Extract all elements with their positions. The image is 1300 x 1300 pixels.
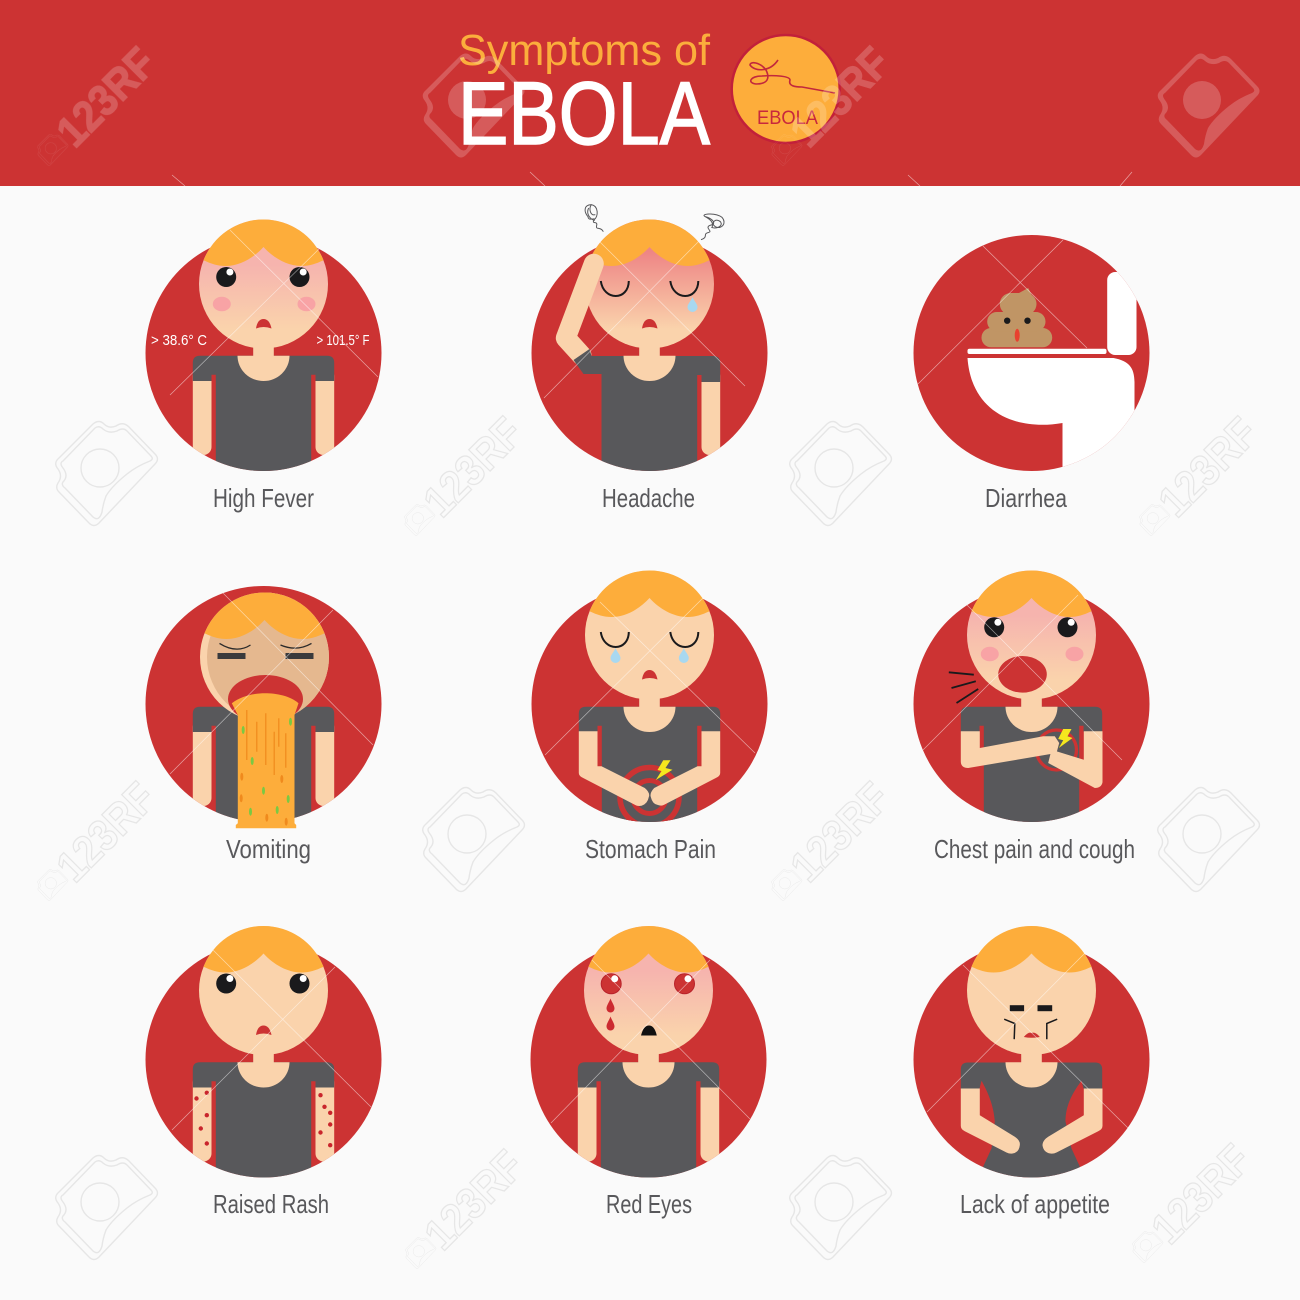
pain rings — [620, 768, 679, 826]
toilet — [968, 272, 1136, 478]
label: lack of appetite: Lack of appetite — [960, 1189, 1110, 1219]
rash dots — [194, 1091, 332, 1147]
arms across chest — [961, 731, 1102, 788]
folded arms — [579, 731, 720, 806]
title: Symptoms of: Symptoms of — [458, 26, 711, 75]
label: raised rash: Raised Rash — [213, 1189, 329, 1219]
panel: diarrhea — [914, 235, 1150, 478]
panel: chest pain and cough — [914, 570, 1150, 829]
label: vomiting: Vomiting — [226, 834, 311, 864]
panel: headache — [532, 205, 768, 478]
title: EBOLA: EBOLA — [458, 63, 711, 163]
watermarks: header — [21, 38, 1259, 183]
squinting eyes — [218, 653, 314, 659]
tired face — [1004, 1005, 1057, 1039]
raised arm — [566, 264, 594, 355]
label: headache: Headache — [602, 483, 695, 513]
panel: stomach pain — [532, 570, 768, 829]
label: high fever: High Fever — [213, 483, 314, 513]
label: diarrhea: Diarrhea — [985, 483, 1067, 513]
watermarks: body — [21, 408, 1267, 1286]
badge: virus icon — [732, 35, 840, 143]
panel: red eyes — [530, 926, 766, 1184]
label: red eyes: Red Eyes — [606, 1189, 692, 1219]
header banner — [0, 0, 1300, 186]
dizzy squiggles — [585, 205, 724, 240]
panel: raised rash — [146, 926, 382, 1184]
watermark lines across icons — [170, 172, 1132, 1130]
temperature celsius: > 38.6° C — [151, 332, 207, 349]
temperature fahrenheit: > 101.5° F — [316, 332, 370, 349]
lightning bolt — [656, 760, 672, 780]
panel: lack of appetite — [914, 926, 1150, 1184]
panel: high fever — [146, 219, 382, 478]
vomit stream — [232, 693, 298, 828]
lightning bolt — [1058, 729, 1072, 748]
label: chest pain and cough: Chest pain and cough — [934, 834, 1135, 864]
panel: vomiting — [146, 586, 382, 829]
label: stomach pain: Stomach Pain — [585, 834, 716, 864]
poop — [982, 288, 1052, 347]
cough lines — [949, 672, 978, 703]
badge: virus icon: EBOLA — [757, 108, 818, 129]
arms on waist — [961, 1088, 1102, 1154]
blood tears — [606, 998, 614, 1012]
